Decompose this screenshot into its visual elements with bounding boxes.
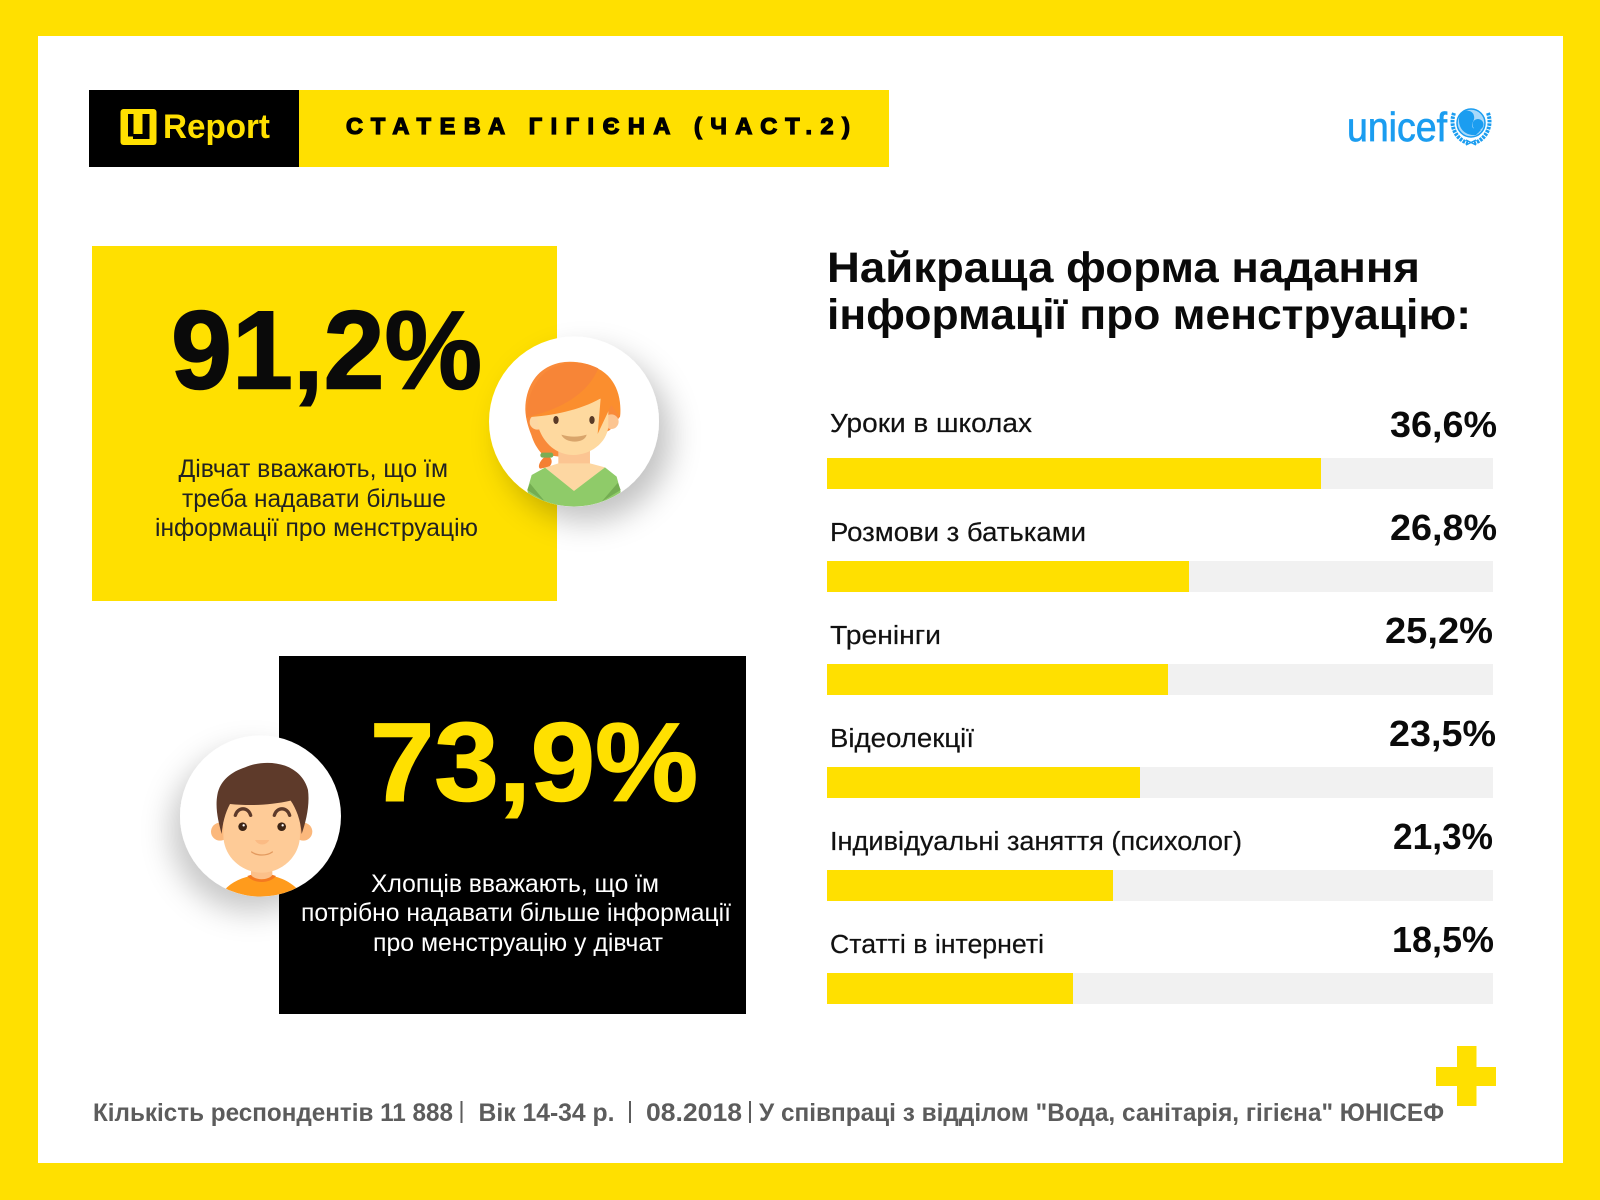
footer note [93, 1099, 1444, 1127]
girls description: треба надавати більше [182, 485, 446, 513]
icon: girl avatar [489, 336, 659, 510]
girls description [155, 455, 478, 542]
panel: boys statistic [279, 656, 746, 1014]
row: Індивідуальні заняття (психолог) 21,3%: Індивідуальні заняття (психолог) [830, 828, 1242, 856]
U-Report logo [89, 90, 299, 167]
boys description: потрібно надавати більше інформації [301, 899, 731, 927]
row: Відеолекції 23,5%: Відеолекції [830, 725, 974, 753]
footer note: Кількість респондентів 11 888 [93, 1099, 453, 1127]
chart heading: інформації про менструацію: [827, 292, 1471, 339]
row: Уроки в школах 36,6%: 36,6% [1390, 404, 1497, 445]
girls description: Дівчат вважають, що їм [178, 455, 448, 483]
row: Уроки в школах 36,6%: Уроки в школах [830, 410, 1032, 438]
big number 91,2%: 91,2% [171, 288, 482, 412]
icon: boy avatar [180, 736, 341, 897]
row: Статті в інтернеті 18,5%: Статті в інтернеті [830, 931, 1044, 959]
girls description: інформації про менструацію [155, 514, 478, 542]
footer note: Вік 14-34 р. [478, 1099, 614, 1127]
row: Розмови з батьками 26,8%: Розмови з батьками [830, 519, 1086, 547]
row: Тренінги 25,2%: Тренінги [830, 622, 941, 650]
banner title [299, 90, 889, 167]
panel: girls statistic [92, 246, 557, 601]
row: Тренінги 25,2%: 25,2% [1385, 610, 1493, 651]
row: Статті в інтернеті 18,5%: 18,5% [1392, 919, 1494, 960]
boys description: Хлопців вважають, що їм [371, 870, 659, 898]
bar chart: preferred information formats [827, 404, 1497, 1004]
row: Відеолекції 23,5%: 23,5% [1389, 713, 1496, 754]
row: Індивідуальні заняття (психолог) 21,3%: 21,3% [1393, 816, 1493, 857]
footer note: 08.2018 [646, 1099, 742, 1127]
footer note: У співпраці з відділом "Вода, санітарія, гігієна" ЮНІСЕФ [759, 1099, 1444, 1127]
row: Уроки в школах 36,6% [827, 404, 1497, 489]
row: Індивідуальні заняття (психолог) 21,3% [827, 816, 1493, 901]
UNICEF logo: unicef [1347, 104, 1448, 150]
boys description: про менструацію у дівчат [373, 929, 664, 957]
row: Розмови з батьками 26,8% [827, 507, 1497, 592]
row: Розмови з батьками 26,8%: 26,8% [1390, 507, 1497, 548]
banner title: СТАТЕВА ГІГІЄНА (ЧАСТ.2) [346, 113, 850, 139]
big number 73,9%: 73,9% [370, 700, 698, 824]
chart heading: Найкраща форма надання [827, 245, 1420, 292]
row: Статті в інтернеті 18,5% [827, 919, 1494, 1004]
boys description [301, 870, 731, 957]
row: Тренінги 25,2% [827, 610, 1493, 695]
row: Відеолекції 23,5% [827, 713, 1496, 798]
icon: yellow plus [1436, 1046, 1496, 1106]
icon: UNICEF globe emblem [1452, 109, 1490, 145]
header banner [89, 90, 889, 167]
chart heading [827, 245, 1471, 339]
U-Report logo: Report [163, 108, 270, 146]
